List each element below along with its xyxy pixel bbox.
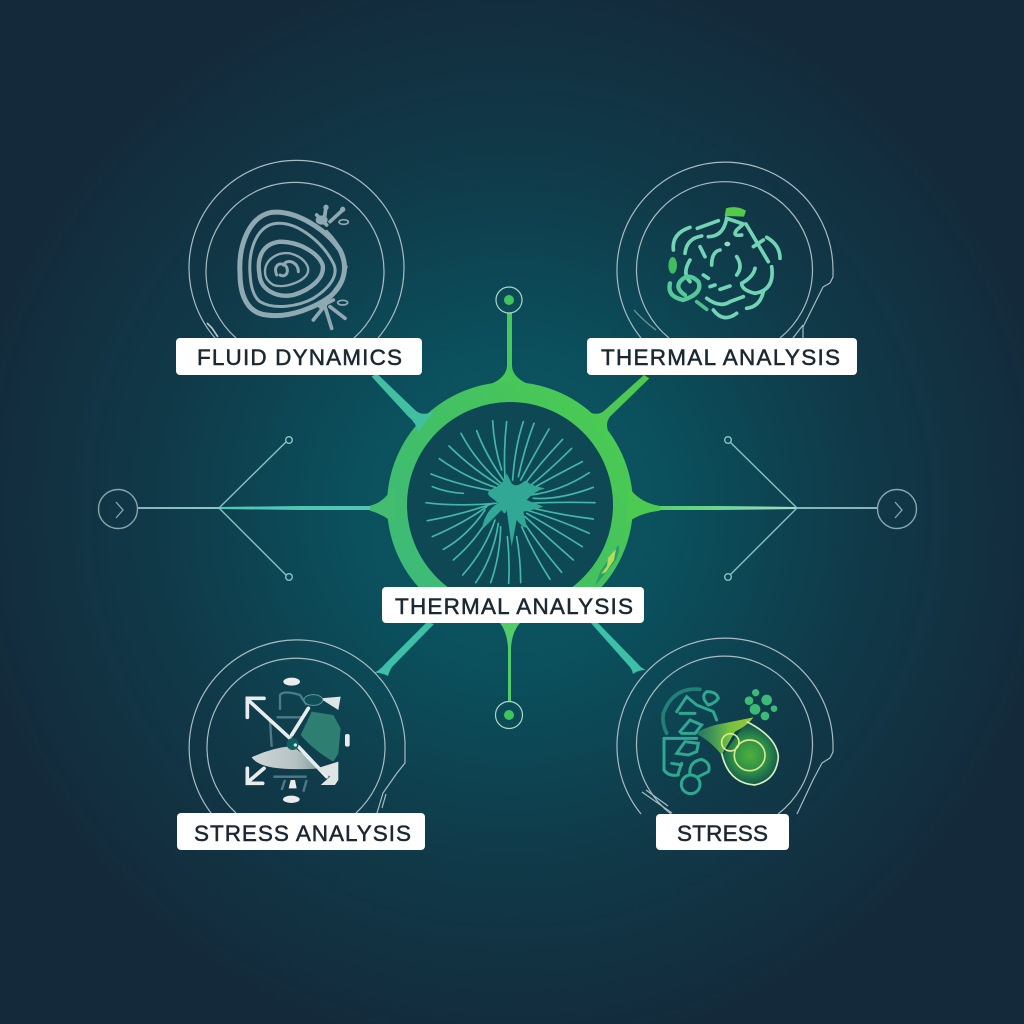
top node and stem [491,287,528,384]
label: thermal analysis top right [587,338,857,375]
label: stress [656,814,789,850]
label: fluid dynamics [176,338,422,375]
label: stress: STRESS [677,821,768,846]
ring flares [370,373,660,525]
icon: fluid swirl [240,205,348,328]
panel: stress [617,638,833,850]
left connector with arrow node [98,437,392,580]
diagonal connectors [374,622,646,676]
radial burst [426,421,595,583]
panel: stress analysis [177,640,425,850]
icon: stress organic cells [663,689,778,794]
icon: stress arrows [247,678,350,803]
central label: thermal analysis: THERMAL ANALYSIS [395,594,633,619]
panel: thermal analysis top right [587,162,857,375]
label: stress analysis [177,813,425,850]
central disc and ring [370,375,660,587]
burst core [482,473,545,547]
panel: fluid dynamics [176,160,422,375]
icon: thermal cell cluster [668,207,780,318]
central label: thermal analysis [382,587,644,623]
label: stress analysis: STRESS ANALYSIS [194,821,411,846]
right connector with arrow node [630,437,916,580]
bottom node and stem [496,623,522,728]
label: fluid dynamics: FLUID DYNAMICS [197,345,402,370]
hot spot on ring [595,545,619,586]
label: thermal analysis top right: THERMAL ANALYSIS [601,345,840,370]
